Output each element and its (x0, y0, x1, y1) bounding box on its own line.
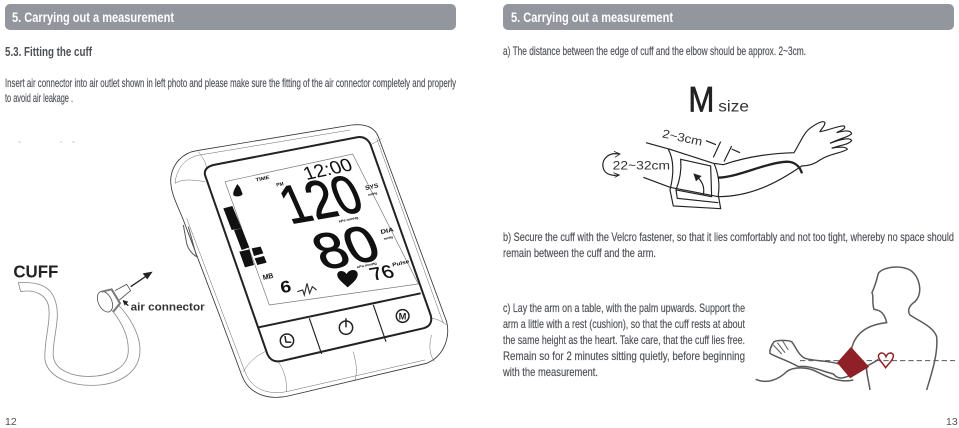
time: 12:00 (300, 154, 356, 184)
lcd readouts: TIME (255, 175, 271, 184)
clock button icon (280, 334, 294, 347)
lcd readouts: DIA (380, 227, 395, 236)
cuff tube illustration (13, 261, 205, 385)
lcd screen (225, 154, 418, 305)
arm position instruction: the same height as the heart. Take care, that the cuff lies free. (503, 333, 745, 347)
size label: M (688, 81, 714, 120)
gap measurement: 2~3cm (661, 127, 704, 149)
lcd readouts (223, 154, 410, 297)
right page header: 5. Carrying out a measurement (511, 9, 673, 25)
tube (18, 283, 128, 376)
size label (688, 81, 749, 120)
distance instruction: a) The distance between the edge of cuff and the elbow should be approx. 2~3cm. (503, 44, 806, 58)
classification bars (223, 206, 267, 267)
memory button icon: M (399, 311, 407, 321)
page number right: 13 (946, 416, 958, 428)
body outline (852, 267, 937, 390)
cuff (668, 149, 721, 209)
velcro instruction (503, 230, 954, 260)
instruction text: Insert air connector into air outlet shown in left photo and please make sure the fitting of the air connector completely and properly (5, 76, 456, 90)
level line (800, 359, 955, 362)
cuff label: CUFF (13, 261, 58, 281)
lcd readouts: kPa mmHg (357, 261, 377, 269)
left page header (5, 4, 456, 30)
unit labels: SYS (365, 183, 379, 192)
seated person diagram (756, 267, 955, 390)
connector label: air connector (131, 302, 205, 314)
size label: size (718, 99, 749, 116)
blood pressure monitor illustration (171, 125, 448, 397)
stray photo marks (18, 141, 75, 143)
heart (878, 353, 893, 368)
lcd readouts: PM (276, 181, 284, 189)
lcd readouts: mmHg (368, 191, 378, 197)
lcd readouts: mmHg (383, 235, 393, 241)
page number left: 12 (5, 416, 17, 428)
arm position instruction: Remain so for 2 minutes sitting quietly, before beginning (503, 349, 745, 363)
systolic value: 120 (270, 163, 372, 235)
power button icon (339, 318, 353, 334)
memory number: 6 (279, 276, 293, 297)
arm and cuff diagram (603, 81, 852, 209)
arm position instruction: arm a little with a rest (cushion), so that the cuff rests at about (503, 317, 745, 331)
right page header (503, 4, 954, 30)
lcd readouts: kPa mmHg (338, 216, 359, 224)
pulse wave icon (297, 283, 317, 295)
tube (718, 162, 802, 178)
arm outline (643, 122, 852, 197)
arm position instruction: with the measurement. (502, 365, 598, 379)
arm position instruction (502, 301, 745, 379)
lcd readouts: MB (262, 271, 274, 282)
heart icon (337, 270, 358, 287)
pulse value: 76 (366, 261, 397, 284)
arm position instruction: c) Lay the arm on a table, with the palm upwards. Support the (503, 301, 745, 315)
arm (770, 340, 852, 378)
diastolic value: 80 (304, 216, 389, 281)
instruction text: to avoid air leakage . (5, 91, 73, 105)
user icon (233, 184, 243, 196)
lcd readouts: Pulse (392, 259, 410, 269)
red cuff (838, 348, 868, 377)
instruction text (5, 76, 456, 105)
memory button icon (396, 310, 409, 322)
left page header: 5. Carrying out a measurement (12, 9, 174, 25)
button row (259, 293, 421, 327)
velcro instruction: remain between the cuff and the arm. (503, 246, 656, 260)
air connector (94, 284, 131, 314)
display panel (205, 137, 431, 361)
section heading: 5.3. Fitting the cuff (5, 44, 92, 59)
circumference label: 22~32cm (613, 158, 670, 172)
arrow (131, 274, 149, 287)
device body (171, 125, 448, 397)
